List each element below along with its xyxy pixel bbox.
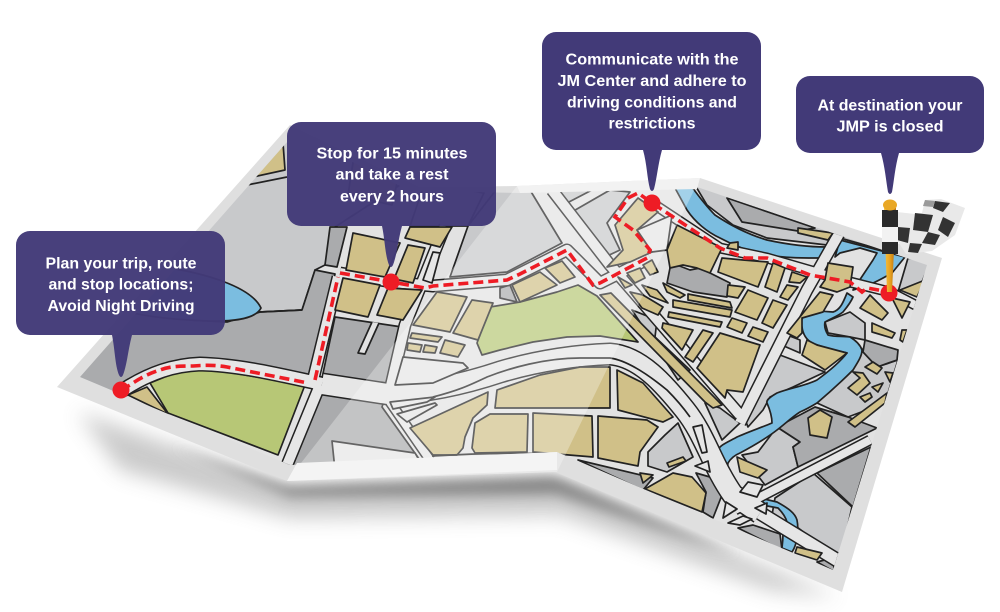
callout: communicate with JM Center: [542, 32, 761, 191]
rivers and lake: [225, 189, 906, 553]
minor road outlines: [247, 177, 690, 456]
callout: destination: At destination your: [818, 98, 962, 114]
main road surfaces: [120, 190, 925, 568]
callout: communicate with JM Center: driving conditions and: [567, 94, 737, 112]
map artwork: [80, 142, 927, 570]
flag cloth: [897, 199, 965, 254]
light plots and traffic islands: [332, 215, 767, 525]
callout: plan your trip: [16, 231, 225, 377]
fold highlight: bottom edge strip: [287, 452, 557, 481]
flag sleeve: [882, 210, 898, 227]
callout: destination: [796, 76, 984, 194]
paper sheet: [57, 125, 942, 592]
pole cap: [883, 200, 897, 210]
city blocks: [128, 143, 925, 560]
main road outlines: [120, 190, 925, 568]
route: red dashed line: [121, 193, 890, 390]
fold highlight: centre panel: [287, 178, 700, 481]
callout: stop for rest: and take a rest: [336, 166, 449, 184]
flag pole: [884, 208, 896, 292]
callout: communicate with JM Center: Communicate with the: [566, 52, 739, 68]
darker grey land areas: [70, 198, 898, 572]
callout: plan your trip: and stop locations;: [48, 276, 194, 294]
map drop shadow: [78, 412, 838, 597]
parks: [150, 285, 638, 455]
grey land areas: [209, 142, 927, 558]
route stop markers: [112, 194, 898, 398]
callout: plan your trip: Avoid Night Driving: [48, 298, 194, 315]
callout: stop for rest: [287, 122, 496, 267]
callout: destination: JMP is closed: [836, 118, 944, 136]
callout: stop for rest: Stop for 15 minutes: [316, 146, 468, 162]
callout: communicate with JM Center: JM Center and adhere to: [558, 73, 747, 90]
flag checks: [897, 200, 955, 253]
folded paper map: [57, 120, 950, 592]
callout: communicate with JM Center: restrictions: [608, 116, 696, 132]
icon: checkered finish flag: [882, 199, 965, 292]
callout: stop for rest: every 2 hours: [340, 188, 444, 206]
roads base: [60, 120, 950, 590]
callout: plan your trip: Plan your trip, route: [46, 256, 197, 272]
